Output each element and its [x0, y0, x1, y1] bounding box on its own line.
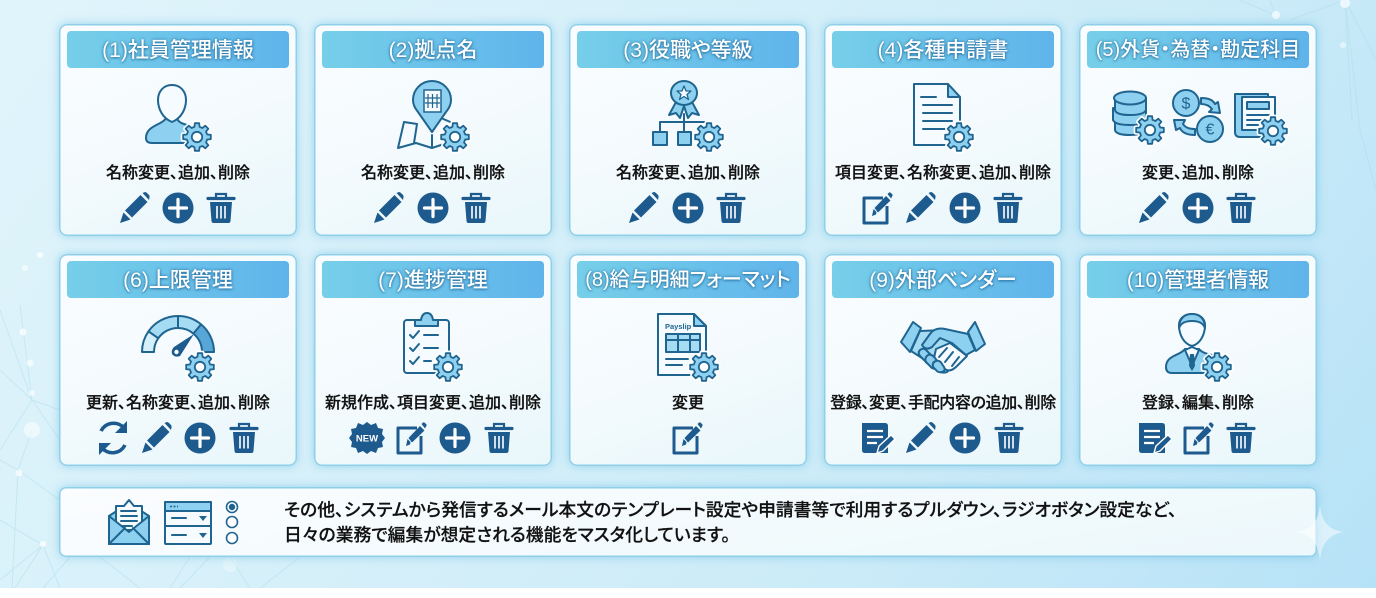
panel: other settings note	[59, 487, 1317, 557]
icon: gauge	[142, 316, 214, 381]
heading: (7)進捗管理	[378, 269, 488, 292]
panel: (3) titles and grades	[569, 24, 807, 236]
icon: handshake	[901, 322, 985, 373]
icon: dropdown form	[165, 502, 211, 544]
panel: (4) applications	[824, 24, 1062, 236]
icon: clipboard	[404, 313, 462, 381]
panel: (5) currency exchange accounts	[1079, 24, 1317, 236]
heading	[577, 261, 799, 298]
heading	[832, 31, 1054, 68]
icon: refresh	[99, 421, 127, 455]
heading: (1)社員管理情報	[102, 39, 254, 62]
icon: new badge	[349, 422, 385, 454]
caption: 新規作成、項目変更、追加、削除	[325, 395, 541, 412]
actions	[674, 422, 703, 453]
icon: mail	[109, 500, 149, 544]
icons	[1139, 313, 1256, 454]
heading	[1087, 31, 1309, 68]
caption: 登録、変更、手配内容の追加、削除	[830, 395, 1056, 412]
heading: (5)外貨・為替・勘定科目	[1096, 39, 1300, 61]
caption: 更新、名称変更、追加、削除	[86, 395, 270, 412]
heading: (2)拠点名	[389, 39, 477, 62]
icons	[120, 84, 236, 224]
heading: (4)各種申請書	[878, 39, 1008, 62]
panel: (6) limit management	[59, 254, 297, 466]
heading: (3)役職や等級	[623, 39, 753, 62]
icon: award org chart	[653, 81, 723, 151]
heading: (8)給与明細フォーマット	[585, 269, 791, 291]
heading	[577, 31, 799, 68]
actions	[864, 192, 1021, 224]
panel: (9) external vendors	[824, 254, 1062, 466]
sparkle	[1298, 506, 1344, 559]
caption: 名称変更、追加、削除	[361, 165, 505, 182]
panel: (10) administrator info	[1079, 254, 1317, 466]
heading: (6)上限管理	[123, 269, 233, 292]
icon: coins, exchange, ledger	[1113, 90, 1287, 145]
icon: radio buttons	[226, 502, 238, 544]
icon: payslip	[658, 314, 718, 381]
caption: 登録、編集、削除	[1142, 395, 1254, 412]
actions	[862, 422, 1022, 454]
actions	[99, 421, 257, 455]
panel: (7) progress management	[314, 254, 552, 466]
heading	[1087, 261, 1309, 298]
caption: 変更、追加、削除	[1142, 165, 1254, 182]
icons	[862, 83, 1023, 224]
actions	[1139, 192, 1254, 224]
note text: 日々の業務で編集が想定される機能をマスタ化しています。	[284, 525, 730, 545]
icons	[349, 312, 514, 454]
icon: coins, exchange, ledger: €	[1206, 122, 1215, 138]
heading: (10)管理者情報	[1127, 269, 1269, 292]
heading	[322, 31, 544, 68]
heading	[832, 261, 1054, 298]
note text: その他、システムから発信するメール本文のテンプレート設定や申請書等で利用するプルダウン、ラジオボタン設定など、	[284, 500, 1177, 520]
icons	[862, 321, 1024, 454]
icons	[629, 80, 746, 224]
icons	[99, 315, 259, 455]
heading	[67, 261, 289, 298]
note text	[284, 500, 1177, 545]
caption: 項目変更、名称変更、追加、削除	[835, 165, 1051, 182]
icons	[657, 313, 720, 454]
caption: 変更	[672, 395, 704, 412]
actions	[629, 192, 744, 224]
icon: map pin building	[398, 81, 469, 151]
icons	[374, 80, 491, 224]
icon: payslip: Payslip	[665, 322, 692, 331]
heading	[322, 261, 544, 298]
heading	[67, 31, 289, 68]
icon: manager	[1166, 314, 1231, 381]
actions	[1139, 422, 1254, 453]
panel: (1) employee info	[59, 24, 297, 236]
icon: new badge: NEW	[356, 434, 378, 444]
icon: document	[914, 84, 973, 151]
panel: (8) payslip format	[569, 254, 807, 466]
icon: employee gear	[146, 85, 211, 151]
actions	[349, 422, 512, 454]
icon: coins, exchange, ledger: $	[1182, 96, 1191, 112]
actions	[120, 192, 234, 224]
heading: (9)外部ベンダー	[869, 269, 1017, 292]
caption: 名称変更、追加、削除	[616, 165, 760, 182]
panel: (2) location name	[314, 24, 552, 236]
icons	[1112, 89, 1290, 224]
actions	[374, 192, 489, 224]
caption: 名称変更、追加、削除	[106, 165, 250, 182]
icons: mail, form, radio buttons	[108, 499, 238, 545]
